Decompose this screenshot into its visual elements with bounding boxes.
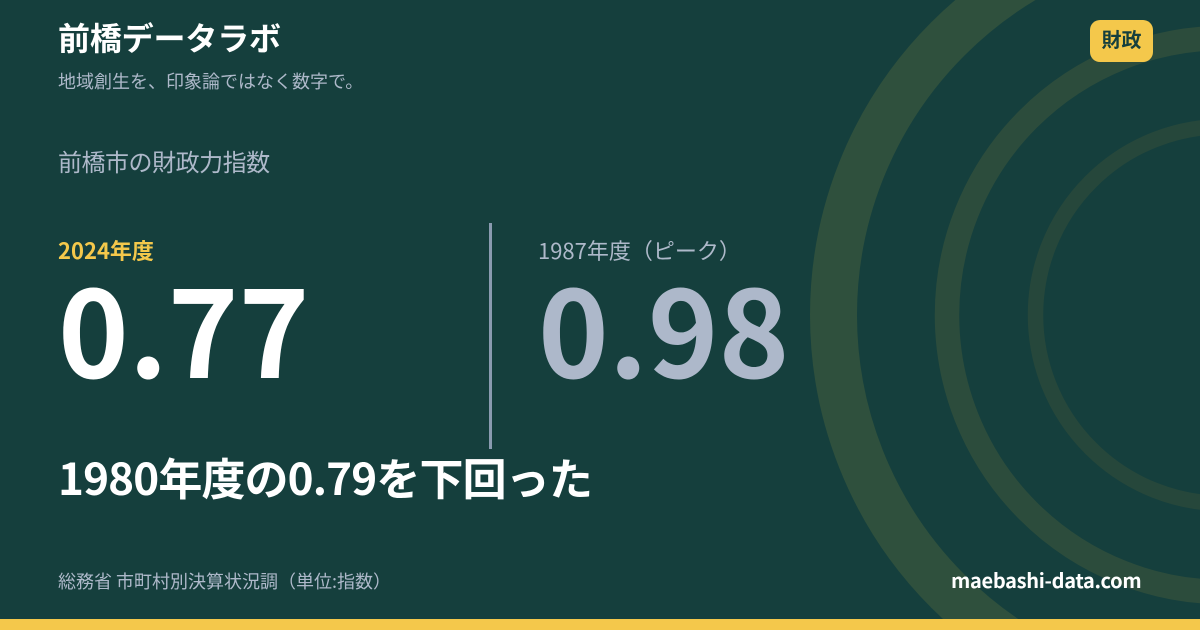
tagline: 地域創生を、印象論ではなく数字で。 <box>58 68 363 94</box>
category badge <box>1090 20 1153 62</box>
bottom accent bar <box>0 619 1200 630</box>
headline finding: 1980年度の0.79を下回った <box>58 444 592 508</box>
vertical divider <box>489 223 492 449</box>
chart title: 前橋市の財政力指数 <box>58 143 270 178</box>
peak value: 0.98 <box>538 239 789 413</box>
category badge: 財政 <box>1102 24 1142 53</box>
brand title: 前橋データラボ <box>58 14 281 60</box>
site url: maebashi-data.com <box>951 565 1141 594</box>
source note: 総務省 市町村別決算状況調（単位:指数） <box>58 568 391 594</box>
peak year label: 1987年度（ピーク） <box>538 234 741 266</box>
current value: 0.77 <box>58 239 309 413</box>
current year label: 2024年度 <box>58 234 154 266</box>
